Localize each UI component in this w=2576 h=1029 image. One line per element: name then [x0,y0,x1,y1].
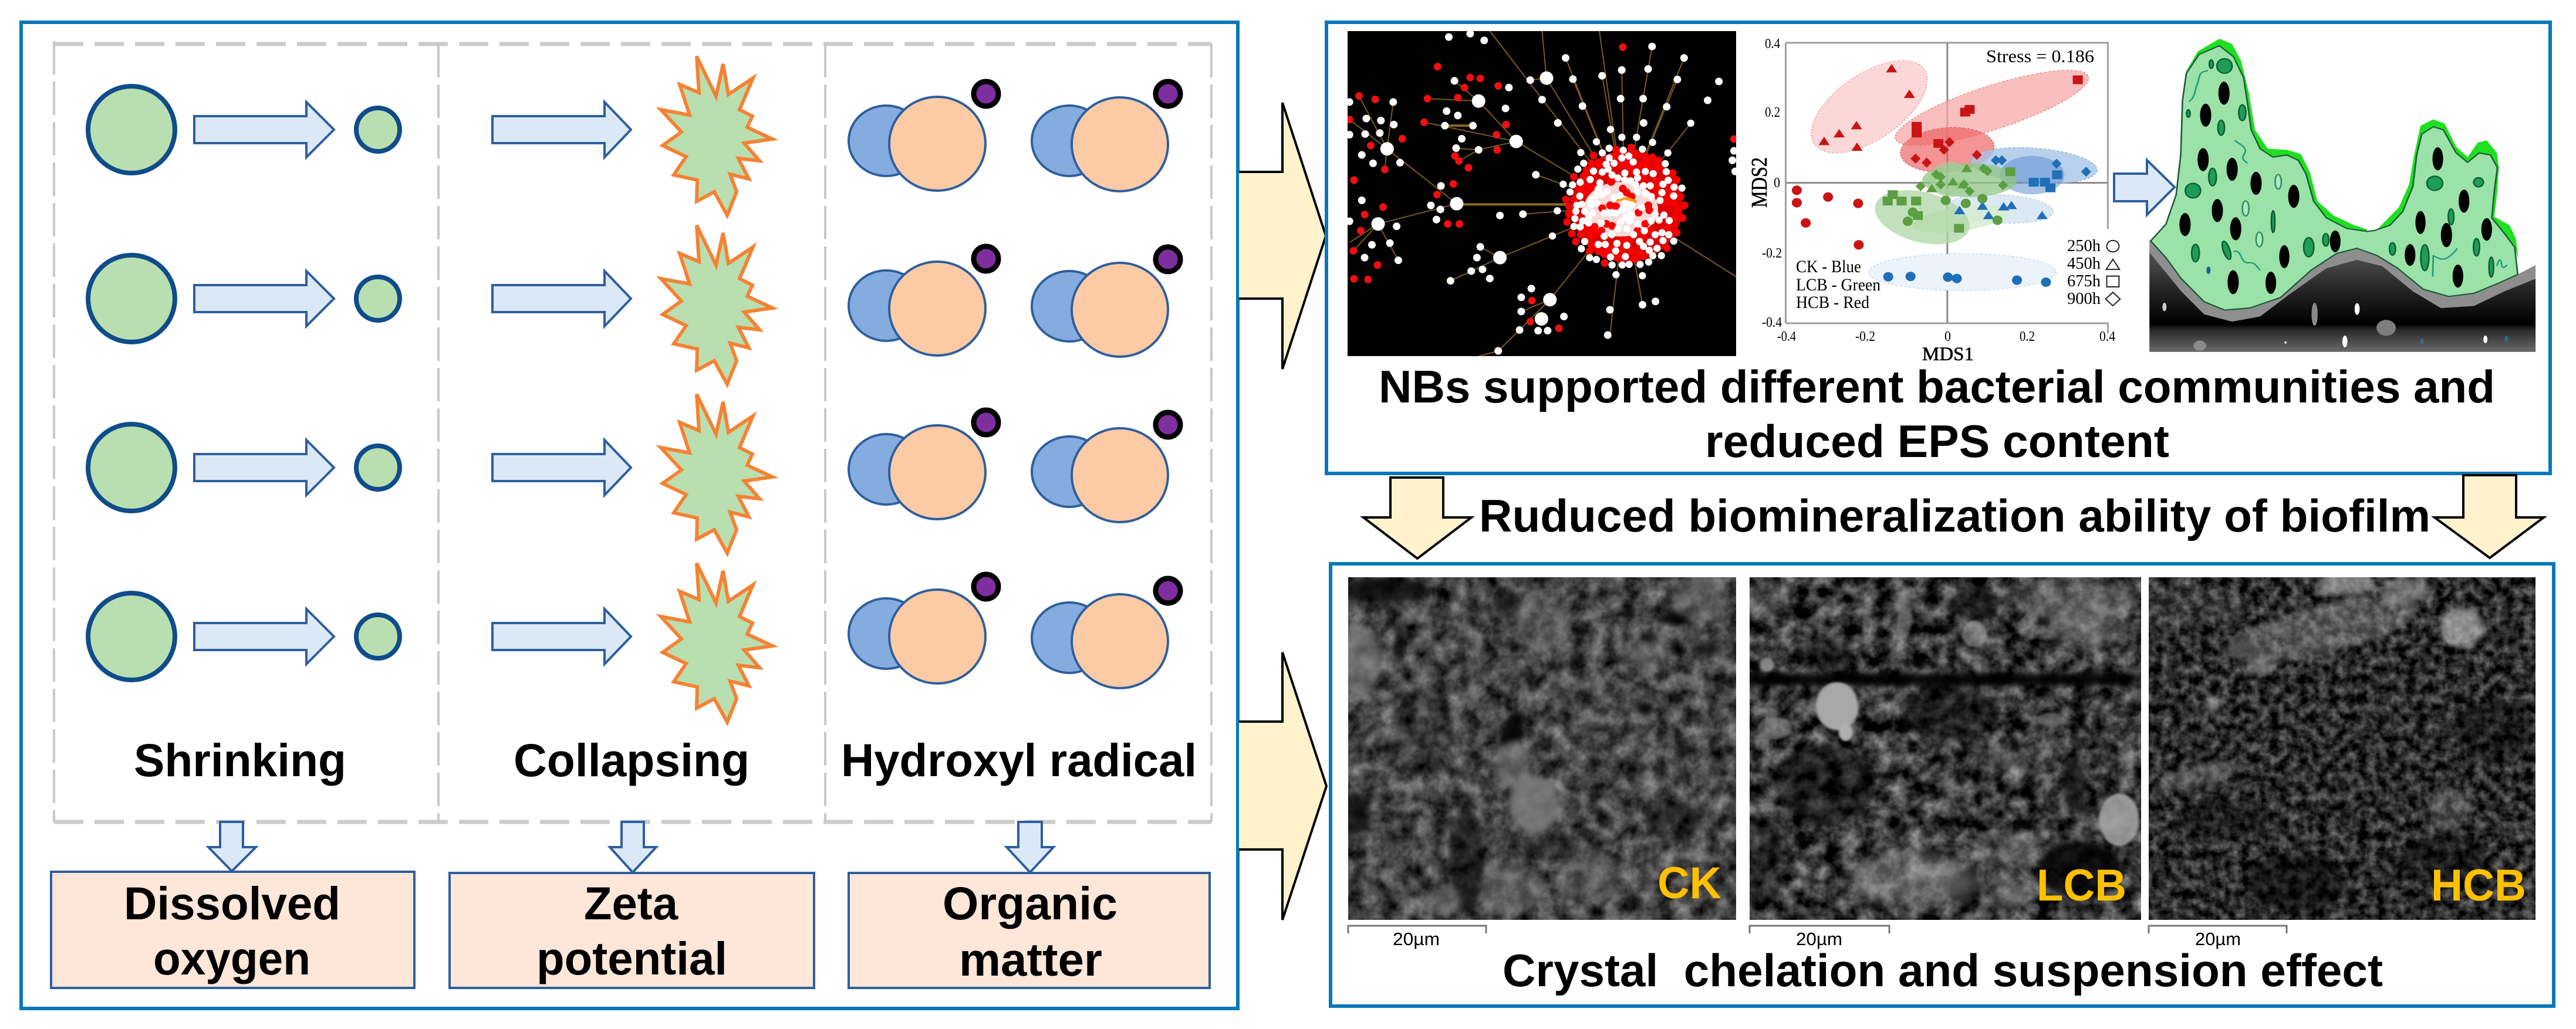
axis and legend labels: -0.4 [1777,329,1796,344]
collapsing row 3 [492,394,772,553]
arrow: community plot to biofilm [2114,160,2175,215]
scale bar: CK [1348,926,1486,949]
collapsing row 1 [492,56,772,215]
scale bar: HCB [2149,926,2287,949]
black pores [2179,82,2492,294]
arrow: right down to SEM panel [2435,475,2544,558]
panel: SEM images frame [1331,564,2554,1006]
text: crystal chelation caption: Crystal chelation and suspension effect [1503,945,2383,996]
radical row 1 right [1032,82,1180,191]
photo: SEM LCB [1734,577,2141,920]
axis and legend labels: Stress = 0.186 [1986,46,2094,66]
column: collapsing bubbles [492,56,772,722]
NMDS plot area in scaled coordinates [1785,43,2120,333]
photo: SEM HCB [2149,577,2536,920]
axis and legend labels [1747,36,2115,365]
radical row 4 left [849,574,998,683]
heading: Shrinking: Shrinking [134,734,346,786]
heading: Hydroxyl radical: Hydroxyl radical [841,734,1197,786]
shrinking row 1 [88,86,400,173]
box: dissolved oxygen: Dissolved [124,877,340,929]
grey conditioning layer [2149,240,2536,321]
axis and legend labels: 0.4 [2099,329,2115,344]
radical row 2 right [1032,247,1180,357]
box: zeta potential: Zeta [584,877,678,929]
shrinking row 2 [88,255,400,342]
collapsing row 4 [492,563,772,722]
chart: co-occurrence network on black [1348,31,1737,356]
text: NBs supported caption: NBs supported different bacterial communities and [1379,361,2495,412]
box: zeta potential: potential [536,932,727,984]
blue cell [2206,266,2210,274]
heading: Collapsing: Collapsing [514,734,749,786]
shrinking row 3 [88,424,400,511]
scale bar: LCB: 20µm [1796,929,1842,949]
text: reduced biomineralization heading: Ruduced biomineralization ability of biofilm [1479,490,2430,541]
collapsing row 2 [492,225,772,384]
label: CK: CK [1657,858,1721,908]
box: dissolved oxygen [51,872,414,988]
arrow: mechanisms to bacterial communities [1239,103,1326,369]
LCB tonal patches [1734,577,2139,912]
radical row 3 left [849,410,998,519]
CK markers [1883,155,2091,287]
arrow: left down to SEM panel [1363,478,1471,558]
arrow: collapsing to zeta potential [610,822,656,872]
radical row 3 right [1032,412,1180,522]
axis and legend labels: 450h [2067,255,2101,273]
axis and legend labels: 0 [1774,175,1780,191]
axis and legend labels: 675h [2067,272,2101,290]
axis and legend labels: -0.2 [1762,246,1782,261]
panel: nanobubble mechanisms frame [21,22,1238,1008]
axis and legend labels: 0 [1944,329,1951,344]
label: LCB: LCB [2037,861,2126,910]
sample ellipses [1788,49,2104,290]
label: HCB: HCB [2431,861,2526,910]
radical row 4 right [1032,578,1180,688]
axis and legend labels: HCB - Red [1796,293,1869,312]
axis and legend labels: 900h [2067,290,2101,308]
network centre ball [1552,123,1691,276]
text: NBs supported caption [1379,361,2495,467]
panel: bacterial communities frame [1326,22,2550,473]
scale bar: LCB [1750,926,1889,949]
axis and legend labels: 0.2 [2020,329,2035,344]
green cells [2185,59,2494,277]
HCB tonal patches [2149,577,2535,913]
LCB markers [1883,163,2015,233]
axis and legend labels: -0.2 [1855,329,1875,344]
bright green biofilm edge left hill [2183,39,2367,232]
axis and legend labels: CK - Blue [1796,257,1861,276]
text: NBs supported caption: reduced EPS content [1705,415,2169,467]
box: organic matter: Organic [943,877,1117,929]
axis and legend labels: 250h [2067,237,2101,255]
time legend symbols [2106,241,2120,306]
axes [1785,43,2108,333]
biofilm body [2150,46,2518,310]
box: organic matter: matter [959,933,1102,986]
axis and legend labels: MDS2 [1747,157,1772,208]
arrow: shrinking to dissolved oxygen [208,822,256,871]
arrow: mechanisms to crystal effect [1239,652,1326,920]
chart: NMDS ordination plot [1747,36,2120,365]
box: dissolved oxygen: oxygen [153,932,310,984]
illustration: biofilm on substrate [2149,39,2536,352]
axis and legend labels: LCB - Green [1796,275,1880,295]
radical row 1 left [849,82,998,191]
axis and legend labels: MDS1 [1922,344,1974,365]
box: zeta potential [450,873,814,988]
HCB markers [1792,64,2083,249]
network nodes [1349,33,1735,351]
filaments [2189,71,2507,276]
pale cells [2242,174,2281,247]
axis and legend labels: 0.2 [1765,105,1780,120]
photo: SEM CK [1341,577,1736,920]
substrate inclusions [2162,303,2508,351]
shrinking row 4 [88,593,400,680]
network links [1349,31,1737,356]
bright green biofilm edge right hill [2377,120,2518,260]
scale bar: HCB: 20µm [2195,929,2241,949]
radical row 2 left [849,246,998,356]
substrate [2149,252,2536,352]
column: hydroxyl radical pairs [849,82,1180,688]
dashed box: three mechanism columns [54,41,1211,822]
box: organic matter [849,873,1210,988]
column: shrinking bubbles [88,86,400,680]
axis and legend labels: 0.4 [1765,36,1780,52]
scale bar: CK: 20µm [1393,929,1440,949]
CK tonal patches [1341,577,1729,916]
arrow: hydroxyl to organic matter [1007,822,1054,872]
axis and legend labels: -0.4 [1762,315,1782,330]
